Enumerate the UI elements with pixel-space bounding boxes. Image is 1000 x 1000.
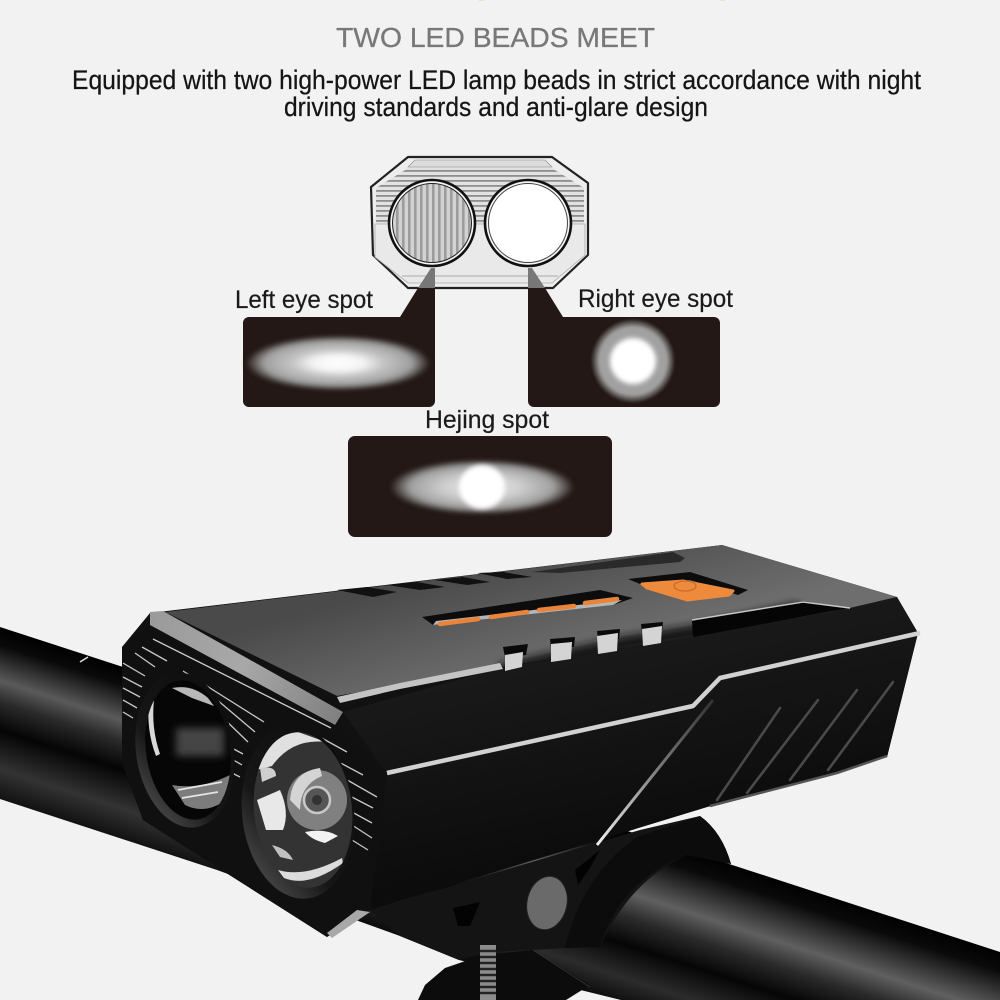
left lens bbox=[135, 673, 235, 828]
silver status lights bbox=[503, 622, 663, 671]
panel: right eye spot bbox=[528, 268, 720, 407]
power button bbox=[628, 572, 748, 600]
bottom strip bbox=[710, 756, 887, 806]
description text bbox=[72, 65, 921, 122]
corner highlight bbox=[327, 910, 370, 938]
side face bbox=[343, 597, 918, 910]
spot labels: Left eye spot bbox=[235, 286, 373, 314]
handlebar bbox=[0, 627, 1000, 1000]
spot labels: Hejing spot bbox=[425, 406, 549, 434]
decorative cropped orange marks at top edge bbox=[479, 0, 725, 1]
top vents bbox=[337, 552, 685, 597]
description text: Equipped with two high-power LED lamp beads in strict accordance with night bbox=[72, 65, 921, 95]
spot labels bbox=[235, 285, 733, 434]
clamp mount bbox=[370, 816, 731, 960]
panel: left eye spot bbox=[243, 268, 435, 407]
right lens bbox=[242, 732, 354, 899]
left bead bbox=[389, 180, 475, 266]
title: TWO LED BEADS MEET bbox=[336, 22, 655, 53]
body silhouette bbox=[122, 545, 918, 937]
front grooves bbox=[123, 639, 377, 850]
lower clamp and screw bbox=[418, 945, 590, 1000]
silver trim line bbox=[387, 633, 920, 773]
top edge highlight bbox=[337, 663, 503, 703]
description text: driving standards and anti-glare design bbox=[284, 92, 708, 122]
right bead bbox=[485, 180, 571, 266]
light body bbox=[122, 545, 920, 938]
side slot bbox=[692, 601, 850, 637]
front chamfer strip bbox=[150, 611, 343, 725]
LED indicator slot bbox=[422, 590, 633, 625]
side ribs bbox=[717, 682, 893, 800]
front face bbox=[122, 625, 387, 937]
top face bbox=[165, 545, 897, 696]
spot labels: Right eye spot bbox=[578, 285, 733, 313]
diagonal trim bbox=[597, 700, 713, 845]
diagram: light front with two LED beads bbox=[371, 157, 588, 288]
panel: hejing spot bbox=[348, 436, 612, 537]
